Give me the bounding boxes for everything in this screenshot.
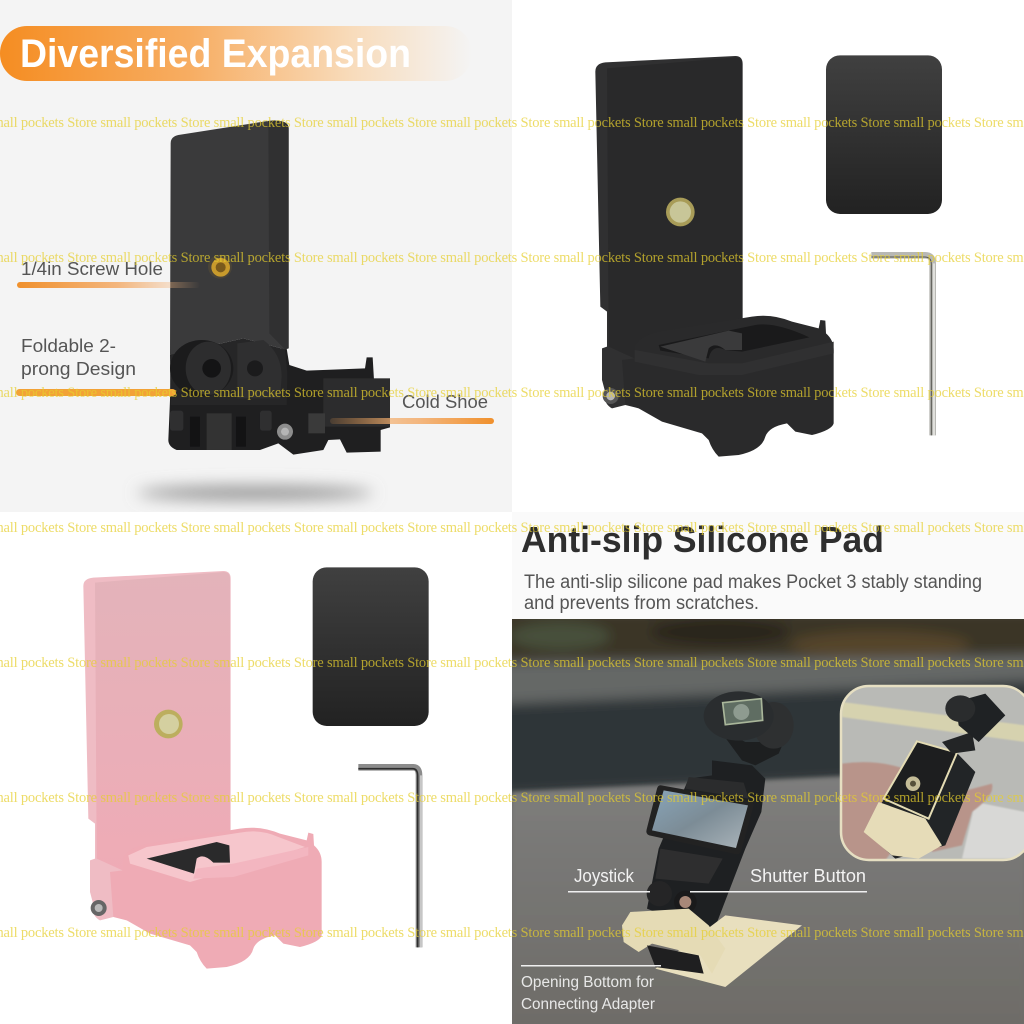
callout: opening bottom [521,965,661,1013]
pink folding bracket [83,571,322,969]
panel: pink kit contents [0,512,512,1024]
panel: black kit contents [512,0,1024,512]
inset photo: stand in hand [840,686,1024,860]
photo: camera on stand [500,610,1024,1024]
black folding bracket [595,56,834,457]
label: cold shoe [330,392,494,424]
icon: brass screw [154,710,183,738]
magnetic plate [313,567,429,726]
product shadow [137,486,373,500]
callout: opening bottom: Opening Bottom for [521,974,654,991]
callout: joystick: Joystick [574,866,635,886]
label: cold shoe: Cold Shoe [402,392,488,412]
magnetic plate [826,55,942,214]
camera gimbal [704,691,782,766]
camera body [646,760,765,935]
callout: shutter button: Shutter Button [750,866,866,886]
label: 1/4in screw hole [17,259,200,288]
icon: brass screw [666,198,695,226]
label: 1/4in screw hole: 1/4in Screw Hole [21,259,163,279]
panel: anti-slip silicone pad [500,512,1024,1024]
callout: joystick [568,866,650,892]
icon: hex key [871,255,934,435]
title banner: Diversified Expansion [20,32,411,76]
description text: and prevents from scratches. [524,593,759,614]
callout: opening bottom: Connecting Adapter [521,996,655,1013]
label: foldable 2-prong design: prong Design [21,359,136,379]
description text [524,572,982,614]
heading: Anti-slip Silicone Pad [521,519,884,560]
label: foldable 2-prong design: Foldable 2- [21,336,116,356]
panel: diversified expansion [0,0,512,512]
cream folding stand [622,909,802,987]
label: foldable 2-prong design [16,336,176,396]
black bracket product [168,120,390,455]
description text: The anti-slip silicone pad makes Pocket 3 stably standing [524,572,982,593]
icon: hex key [358,767,421,947]
